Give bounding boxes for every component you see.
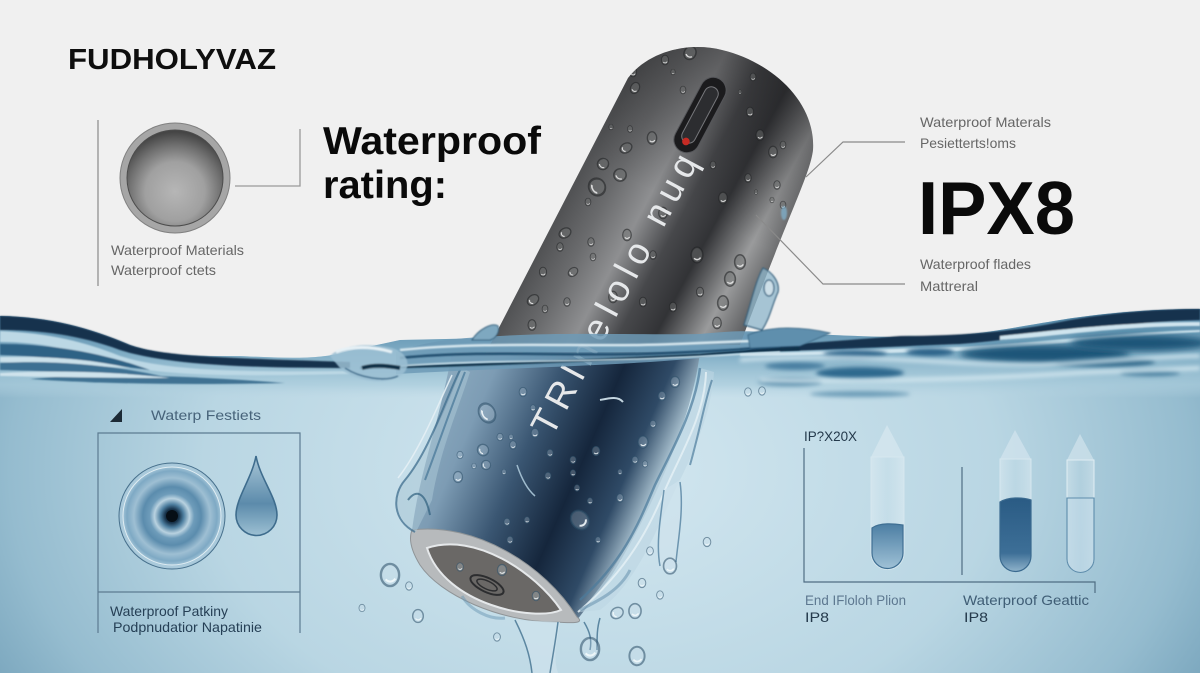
heading: waterproof rating: rating:	[323, 164, 447, 207]
tube 1	[871, 425, 904, 570]
material caption	[111, 242, 244, 278]
icon: corner triangle	[110, 409, 122, 422]
upper splash textures	[472, 206, 830, 348]
icon: material cup	[120, 123, 230, 233]
title: FUDHOLYVAZ	[68, 44, 276, 76]
rating value: IPX8	[918, 166, 1075, 250]
panel: IPX8 callout	[756, 114, 1075, 294]
product capsule above water	[490, 44, 813, 345]
capsule brand text: TRIneIolo nuq	[523, 147, 706, 442]
icon: water drop	[236, 456, 277, 536]
icon: ripple	[119, 463, 225, 569]
panel: IP level tubes	[804, 425, 1095, 625]
upper caption: Waterproof Materals	[920, 114, 1051, 130]
panel caption	[110, 603, 262, 635]
droplets above water	[525, 44, 786, 330]
tube captions: IP8	[964, 609, 988, 625]
power slot	[669, 73, 731, 157]
tube captions: End IFloloh Plion	[805, 592, 906, 608]
left wave streaks	[0, 316, 350, 384]
product capsule underwater	[410, 352, 700, 623]
material caption: Waterproof ctets	[111, 262, 216, 278]
heading: waterproof rating: Waterproof	[323, 120, 542, 163]
bottom disc	[410, 529, 580, 623]
water splash around capsule	[396, 368, 714, 673]
water surface back	[0, 309, 1200, 398]
tube captions: IP8	[805, 609, 829, 625]
water surface front	[330, 206, 830, 381]
upper caption: Pesietterts!oms	[920, 135, 1016, 151]
left splash blob	[330, 345, 408, 381]
lower caption: Mattreral	[920, 278, 978, 294]
panel heading: IP?X20X	[804, 428, 858, 444]
material caption: Waterproof Materials	[111, 242, 244, 258]
lower caption: Waterproof flades	[920, 256, 1031, 272]
panel heading: Waterp Festiets	[151, 407, 261, 423]
heading: waterproof rating	[323, 120, 542, 207]
tube captions: Waterproof Geattic	[963, 592, 1089, 608]
panel: waterproof features	[98, 407, 300, 635]
panel: materials callout	[98, 120, 300, 286]
panel caption: Waterproof Patkiny	[110, 603, 228, 619]
bubbles	[359, 387, 765, 665]
tube 2	[1000, 430, 1031, 572]
water body	[0, 309, 1200, 673]
upper caption	[920, 114, 1051, 151]
lower caption	[920, 256, 1031, 294]
tube 3	[1067, 434, 1094, 572]
droplets underwater	[453, 376, 680, 544]
right wave streaks	[740, 309, 1200, 356]
tube captions	[805, 592, 1089, 625]
panel caption: Podpnudatior Napatinie	[113, 619, 262, 635]
